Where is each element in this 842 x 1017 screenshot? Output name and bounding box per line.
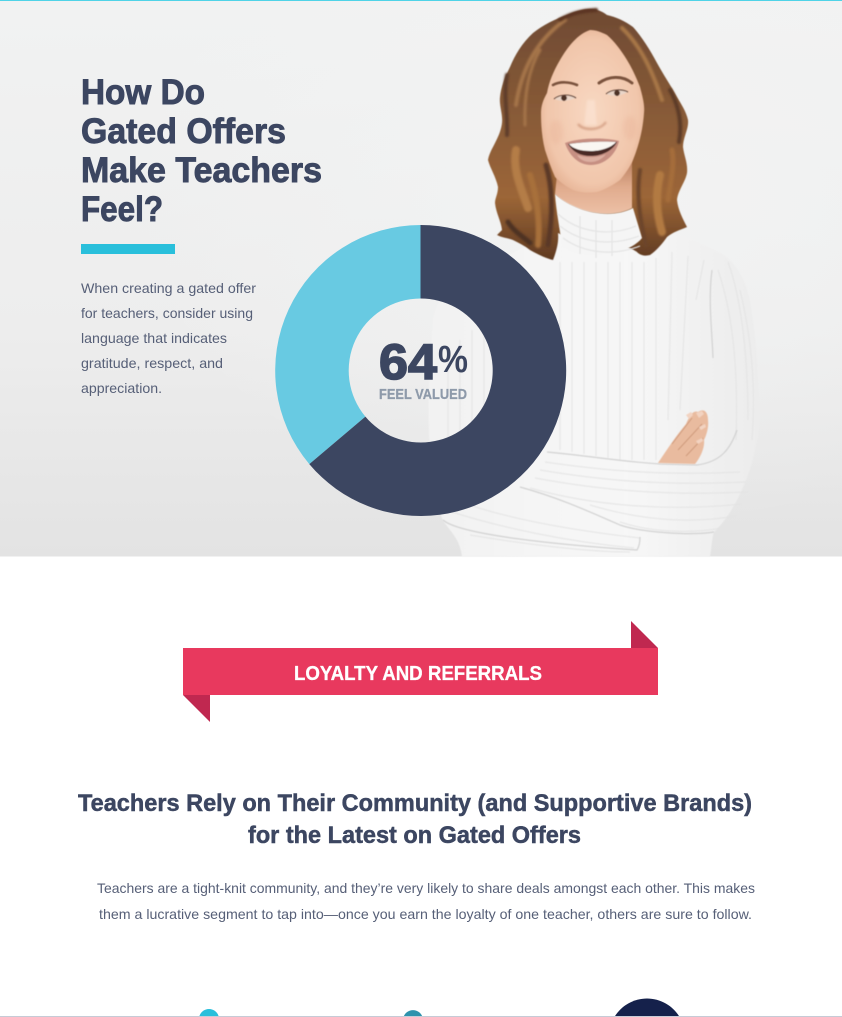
segment: 36% bbox=[275, 225, 420, 464]
title: How Do bbox=[81, 73, 205, 112]
hand bbox=[658, 410, 708, 464]
eyes bbox=[554, 90, 628, 101]
hair strands bbox=[505, 10, 680, 245]
sweater torso bbox=[429, 196, 759, 556]
ribbon banner bbox=[183, 621, 658, 722]
title: Gated Offers bbox=[81, 112, 286, 151]
donut value: FEEL VALUED bbox=[379, 386, 467, 403]
chart peek: bubbles on baseline bbox=[0, 999, 842, 1017]
donut value bbox=[379, 334, 468, 403]
intro text: When creating a gated offer bbox=[81, 280, 256, 296]
photo: smiling woman with crossed arms bbox=[429, 9, 759, 556]
intro text: appreciation. bbox=[81, 380, 162, 396]
title: Make Teachers bbox=[81, 151, 322, 190]
cheek shading bbox=[549, 116, 637, 144]
hair silhouette bbox=[488, 9, 688, 260]
accent bar bbox=[81, 244, 175, 254]
donut value: 64 bbox=[379, 334, 437, 390]
face bbox=[541, 30, 644, 193]
section paragraph: them a lucrative segment to tap into—once you earn the loyalty of one teacher, others are sure to follow. bbox=[99, 906, 752, 922]
sweater ribs bbox=[446, 252, 754, 552]
nose bbox=[578, 100, 606, 129]
section paragraph bbox=[97, 880, 755, 922]
donut value: % bbox=[438, 339, 468, 381]
segment: 64% bbox=[309, 225, 566, 516]
eyebrows bbox=[553, 77, 632, 85]
photo background bbox=[0, 0, 842, 556]
section heading: Teachers Rely on Their Community (and Supportive Brands) bbox=[78, 790, 752, 817]
collar ribs bbox=[558, 214, 640, 258]
ribbon banner: LOYALTY AND REFERRALS bbox=[294, 663, 542, 685]
smile bbox=[565, 139, 619, 165]
turtleneck collar bbox=[555, 194, 642, 255]
section heading bbox=[78, 790, 752, 849]
arm creases bbox=[443, 270, 737, 550]
title: Feel? bbox=[81, 190, 163, 229]
donut chart: 64% feel valued bbox=[275, 225, 566, 516]
intro text: language that indicates bbox=[81, 330, 227, 346]
intro text: gratitude, respect, and bbox=[81, 355, 223, 371]
section paragraph: Teachers are a tight-knit community, and they’re very likely to share deals amongst each other. This makes bbox=[97, 880, 755, 896]
neck bbox=[555, 160, 632, 214]
title bbox=[81, 73, 322, 229]
intro text: for teachers, consider using bbox=[81, 305, 253, 321]
section heading: for the Latest on Gated Offers bbox=[248, 822, 581, 849]
intro text bbox=[81, 280, 256, 396]
